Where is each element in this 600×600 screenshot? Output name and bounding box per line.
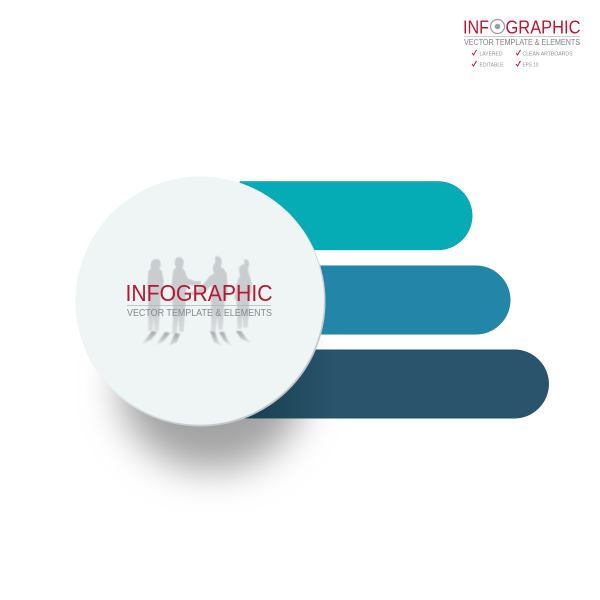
logo target icon — [490, 20, 504, 34]
bar 3: navy — [220, 350, 549, 418]
person 4 — [235, 260, 251, 328]
check list: CLEAN ARTBOARDS — [522, 52, 573, 58]
check list: EPS 10 — [522, 62, 539, 68]
logo title: INF — [463, 18, 489, 38]
subheading: VECTOR TEMPLATE & ELEMENTS — [127, 308, 272, 319]
people foot reflections — [142, 331, 251, 346]
bar 2: blue — [220, 266, 510, 334]
logo subtitle: VECTOR TEMPLATE & ELEMENTS — [464, 38, 580, 47]
logo top right — [463, 18, 580, 68]
main circle — [76, 176, 326, 426]
check list: EDITABLE — [480, 62, 504, 68]
person 2 with arm — [172, 258, 200, 333]
people silhouettes — [148, 257, 251, 333]
bar 1: teal — [220, 182, 472, 250]
check list — [472, 50, 573, 68]
logo top right: GRAPHIC — [506, 18, 580, 38]
circle drop shadow — [120, 306, 304, 470]
person 1 — [148, 260, 163, 330]
heading: INFOGRAPHIC: INFOGRAPHIC — [126, 280, 273, 306]
check list: LAYERED — [480, 52, 503, 58]
person 3 with arm — [191, 257, 227, 331]
